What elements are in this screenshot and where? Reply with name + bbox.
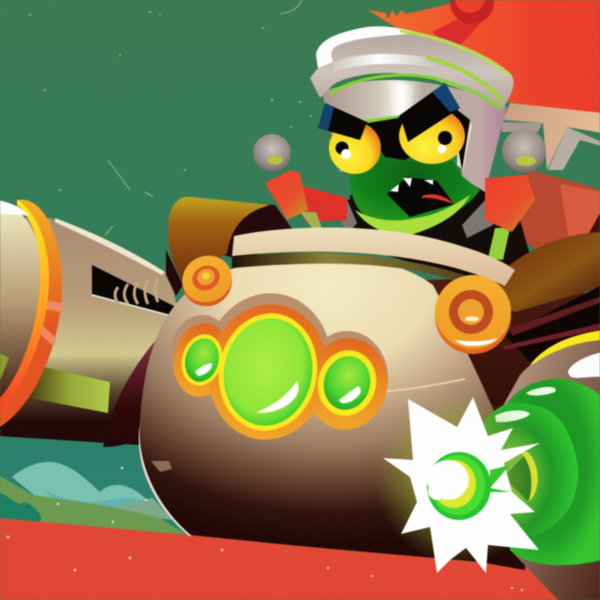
- right bolt: [435, 275, 511, 354]
- left shoulder armour: [166, 197, 300, 296]
- left cannon: [0, 200, 180, 447]
- nose lime: [0, 352, 9, 385]
- helmet highlight: [388, 82, 416, 118]
- black gap: [505, 285, 600, 362]
- highlight: [568, 352, 600, 378]
- collar: [232, 228, 515, 286]
- inner yellow: [520, 452, 538, 503]
- grey far hill: [115, 498, 172, 520]
- collar band: [232, 252, 502, 292]
- right gem: [318, 351, 376, 415]
- grip: [265, 170, 308, 220]
- red plates: [510, 170, 600, 262]
- nose cone: [0, 200, 41, 405]
- shot inner: [431, 455, 485, 515]
- rim white band: [333, 54, 435, 72]
- floor specks: [7, 467, 523, 591]
- outer shadow: [170, 283, 388, 445]
- starburst: [383, 397, 540, 573]
- right lever: [485, 129, 546, 260]
- hills and ground: [0, 462, 190, 540]
- stick: [300, 212, 322, 228]
- grip: [485, 175, 535, 232]
- left pupil: [336, 142, 351, 159]
- ball glow: [516, 156, 536, 166]
- right brow: [365, 83, 460, 142]
- black brow mask: [362, 100, 470, 170]
- face: [350, 147, 480, 227]
- scuff: [151, 461, 172, 472]
- lower dark mass: [420, 278, 600, 570]
- grey frame: [548, 127, 600, 170]
- spring: [115, 278, 158, 304]
- slot: [92, 265, 178, 318]
- slot edge: [92, 294, 175, 318]
- distant hills: [12, 462, 148, 510]
- right cannon: [480, 330, 600, 600]
- orange shell: [168, 295, 394, 449]
- left lever: [253, 134, 347, 228]
- dark interior: [350, 185, 530, 285]
- chin lime: [355, 195, 470, 235]
- centre gem: [215, 311, 321, 433]
- pilot head: [310, 26, 514, 262]
- right pupil: [438, 131, 452, 154]
- arm: [303, 186, 347, 222]
- bush: [0, 492, 41, 522]
- shell: [495, 333, 600, 600]
- torus lighter lip: [480, 403, 578, 537]
- shot yellow: [432, 460, 476, 508]
- left gem: [180, 334, 224, 386]
- tan frame: [503, 103, 600, 170]
- rim white top: [316, 26, 420, 68]
- left bolt: [174, 248, 240, 314]
- inner ring: [0, 200, 49, 415]
- inner dark: [503, 453, 538, 503]
- left eye: [329, 122, 381, 174]
- right eye: [399, 108, 465, 164]
- gem cluster: [168, 283, 394, 449]
- brown pauldron: [475, 232, 600, 312]
- maroon panel: [103, 318, 176, 447]
- nose cap: [0, 200, 30, 216]
- helmet lime band: [330, 75, 500, 109]
- pot body: [139, 228, 515, 565]
- ring stripes: [40, 300, 62, 347]
- right shoulder armour: [350, 170, 600, 570]
- left brow: [318, 103, 367, 140]
- rim lime edge top: [400, 31, 510, 75]
- stick: [488, 228, 510, 260]
- ear guards: [339, 195, 493, 238]
- lime stripe: [30, 367, 110, 413]
- grass: [0, 475, 190, 540]
- shot ring: [427, 452, 491, 520]
- rim lime edge lower: [427, 58, 503, 103]
- yellow trim: [530, 330, 600, 365]
- scratch: [368, 379, 465, 392]
- antenna: [432, 0, 494, 50]
- shot white core: [427, 460, 469, 500]
- ball: [502, 129, 546, 173]
- muzzle glow: [375, 395, 545, 565]
- torus highlights: [495, 387, 556, 422]
- barrel: [0, 218, 180, 445]
- hull edge: [139, 423, 192, 536]
- hill shade: [40, 487, 148, 508]
- face plate edge: [457, 110, 472, 170]
- red floor: [0, 518, 600, 600]
- green wedge: [490, 465, 510, 492]
- helmet body: [322, 80, 507, 192]
- top highlight: [55, 218, 165, 275]
- ball glow: [267, 156, 283, 164]
- orange ring outer: [0, 200, 62, 428]
- grey bar: [502, 122, 542, 132]
- rear frame: [502, 103, 600, 170]
- scratches and specks on the sky: [29, 0, 312, 235]
- helmet rim: [310, 26, 514, 110]
- shot white blob: [428, 482, 446, 500]
- body under head: [345, 190, 500, 262]
- green torus: [495, 379, 600, 565]
- mouth: [387, 177, 454, 217]
- yellow rings: [176, 305, 384, 439]
- red banner: [368, 0, 600, 115]
- hull: [139, 257, 513, 565]
- ball: [253, 134, 291, 172]
- maroon blades: [510, 296, 600, 336]
